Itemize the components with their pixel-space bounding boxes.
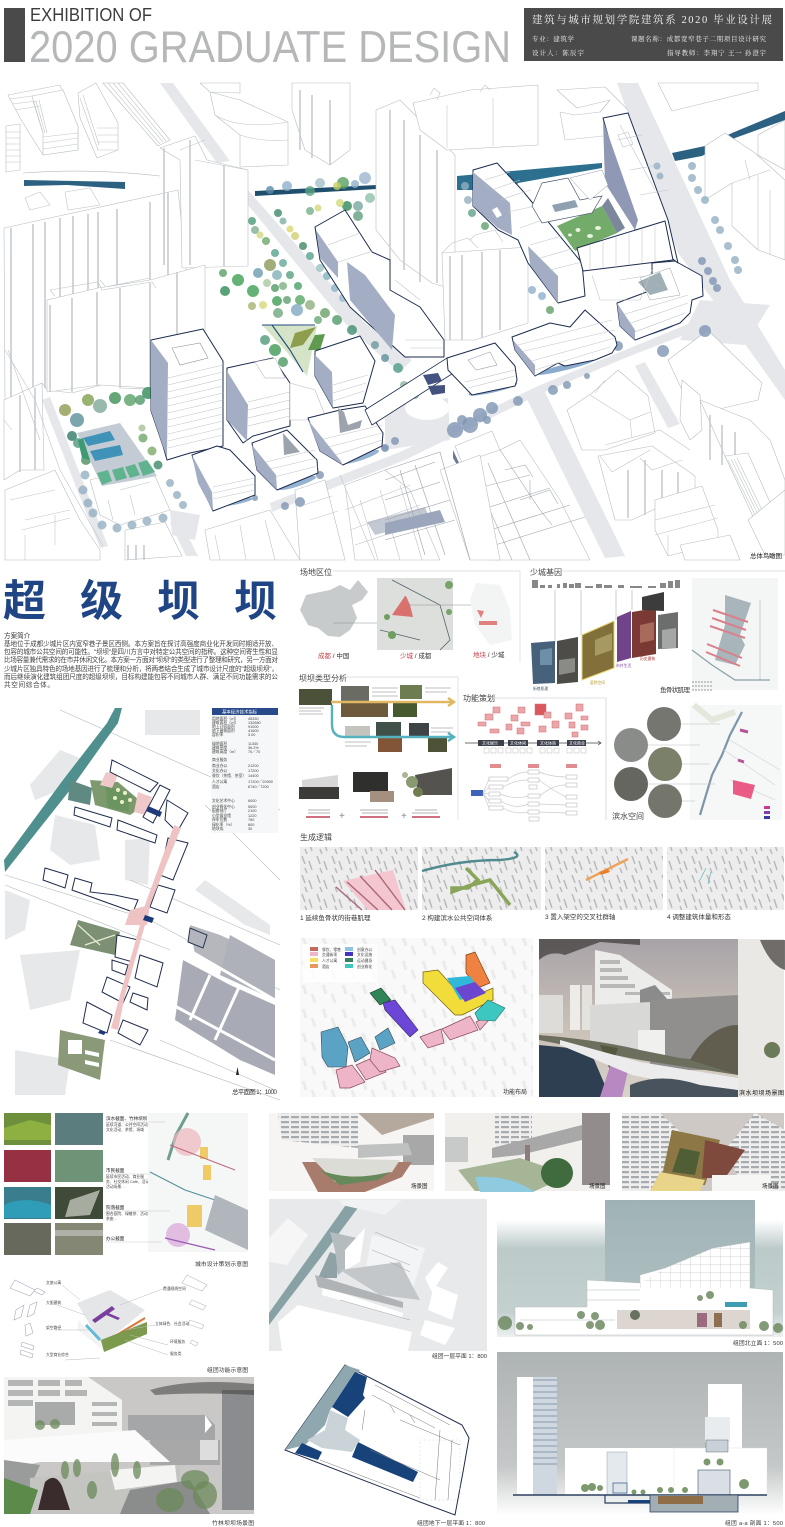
render: bamboo bazi scene bbox=[4, 1377, 254, 1527]
courtyard green bbox=[68, 772, 152, 815]
grey residential blocks bbox=[175, 925, 275, 1075]
beige podium band bbox=[617, 1310, 750, 1329]
panel: shaocheng gene: 庭院空间 bbox=[590, 680, 605, 685]
green courtyard bbox=[557, 198, 625, 251]
strategy texts: 院落截面 bbox=[106, 1204, 125, 1211]
caption: basement plan: 组团地下一层平面 1：800 bbox=[417, 1519, 485, 1527]
part labels: 服务类 bbox=[170, 1351, 182, 1356]
stats table: 绿化率（%） bbox=[212, 822, 234, 827]
render: scene 3 bbox=[622, 1113, 785, 1191]
roads bbox=[42, 83, 785, 558]
panel: shaocheng gene: 街巷肌理 bbox=[533, 686, 548, 691]
stats table: 41600 bbox=[248, 729, 259, 733]
green roof and hill bbox=[539, 1035, 738, 1075]
heading: programming: 功能策划 bbox=[463, 693, 495, 703]
stats table: 11340 bbox=[248, 742, 258, 746]
project title: 超级坝坝 bbox=[3, 578, 311, 626]
legend: 运动健身 bbox=[357, 958, 372, 963]
trees in foreground bbox=[539, 939, 640, 960]
header: project info box: 建筑与城市规划学院建筑系 2020 毕业设计展 bbox=[532, 13, 772, 26]
stats table: 70／70 bbox=[248, 749, 260, 754]
trees around the site bbox=[59, 162, 742, 532]
panel: shaocheng gene: 市井生活 bbox=[616, 663, 631, 668]
text block: project description: 包容的城市公共空间的可能性。"坝坝"是四川方言中对特定公共空间的指称。这种空间寄生性和显 bbox=[4, 647, 278, 656]
stats table: 小型展览馆 bbox=[212, 813, 231, 818]
project building: south podium bbox=[192, 446, 255, 511]
stats table: 地上计容面积 bbox=[212, 724, 235, 729]
site map: shaocheng bbox=[470, 583, 512, 645]
map captions: 少城 / 成都 bbox=[400, 651, 432, 660]
header: project info box: 指导教师：李翔宁 王一 孙澄宇 bbox=[667, 48, 766, 57]
typology photos: row two bbox=[345, 722, 447, 752]
strategy texts: 文化活动、茶馆、场域 bbox=[106, 1127, 144, 1132]
panel: shaocheng gene bbox=[530, 567, 785, 694]
trees bbox=[581, 1458, 749, 1494]
left white building bbox=[4, 1377, 122, 1445]
header: project info box: 设计人：陈辰宇 bbox=[532, 48, 584, 57]
stats table: 30 bbox=[248, 827, 252, 831]
orange volume bbox=[466, 952, 490, 988]
stats table: 建筑密度 bbox=[212, 745, 227, 750]
panel: programming bbox=[463, 693, 606, 821]
part labels: 架空路径 bbox=[46, 1325, 61, 1330]
stats table: 基本经济技术指标 bbox=[222, 708, 258, 716]
background buildings: north centre bbox=[200, 83, 785, 340]
caption: section: 组团 a-a 剖面 1：500 bbox=[725, 1519, 783, 1527]
road lines bbox=[5, 710, 280, 1100]
project building: long bar bbox=[315, 210, 444, 357]
tower and buildings bbox=[539, 939, 784, 1097]
legend: 创业孵化 bbox=[357, 964, 372, 969]
bamboo trees bbox=[35, 1419, 217, 1512]
caption: 场景图 bbox=[589, 1182, 606, 1190]
stats table: 21200 bbox=[248, 764, 259, 768]
stats table: 132680 bbox=[248, 721, 261, 725]
stats table: 17200 bbox=[248, 769, 259, 773]
building silhouette bbox=[515, 1242, 773, 1335]
caption: bamboo scene: 竹林坝坝场景图 bbox=[212, 1519, 254, 1527]
strategy texts: 市民截面 bbox=[106, 1167, 125, 1174]
project building: third tower bbox=[315, 336, 375, 408]
project building: J block bbox=[617, 261, 703, 340]
project building: west wing bbox=[473, 163, 585, 303]
strategy texts: 茶座… bbox=[106, 1216, 118, 1221]
strategy texts: 延续市民活动、商业服 bbox=[106, 1174, 144, 1179]
header: left block and title bbox=[4, 5, 511, 72]
timeline category tags bbox=[478, 740, 586, 753]
project building: I block bbox=[512, 310, 617, 376]
project building: courtyard block F bbox=[308, 406, 383, 465]
caption: masterplan aerial: 总体鸟瞰图 bbox=[750, 551, 782, 560]
waterfront photos bbox=[614, 707, 682, 818]
project building: mid block bbox=[577, 221, 673, 300]
formula texts and plus signs: + bbox=[339, 811, 345, 822]
ground and basement bbox=[513, 1494, 767, 1496]
main massing bbox=[77, 1290, 147, 1352]
heading: shaocheng gene: 少城基因 bbox=[530, 567, 562, 577]
heading: 2020 graduate design: 2020 GRADUATE DESIGN bbox=[29, 23, 511, 72]
aerial axonometric drawing bbox=[3, 83, 785, 563]
right parts bbox=[182, 1275, 207, 1346]
strategy plan bbox=[148, 1113, 248, 1252]
stats table: 人才公寓 bbox=[212, 779, 227, 784]
stats table: 地下建筑面积 bbox=[212, 728, 235, 733]
timeline category tags: 文化休闲 bbox=[510, 740, 526, 746]
stats table: 创业孵化中心 bbox=[212, 804, 235, 809]
typology captions bbox=[299, 688, 453, 746]
text block: project description bbox=[4, 631, 278, 689]
text block: project description: 共空间综合体。 bbox=[4, 680, 54, 689]
park and podium grounds bbox=[70, 920, 120, 955]
stats table: 商业办公 bbox=[212, 763, 227, 768]
pink pedestrian street bbox=[111, 825, 181, 1030]
stats table: 停车位数 bbox=[212, 817, 227, 822]
green and person bbox=[4, 1478, 38, 1514]
pink podium blocks bbox=[336, 1012, 496, 1088]
legend: 人才公寓 bbox=[322, 958, 337, 963]
stats table: 文化办公 bbox=[212, 768, 227, 773]
link bridge and entry pavilion bbox=[365, 358, 455, 425]
stats table: 36.2% bbox=[248, 746, 259, 750]
caption: master plan: 总平面图 1：1000 bbox=[232, 1087, 277, 1096]
panel: urban design strategy plan bbox=[106, 1113, 248, 1268]
step 2: waterfront public system bbox=[422, 847, 541, 922]
stats table: 5000 bbox=[248, 805, 256, 809]
plan: basement bbox=[285, 1365, 485, 1527]
panel: precedent photos bbox=[4, 1113, 103, 1255]
skyline bars bbox=[532, 580, 680, 588]
stats table: 绿地面积 bbox=[212, 741, 227, 746]
left parts bbox=[10, 1280, 45, 1358]
stats table: 17200／20900 bbox=[248, 779, 273, 784]
project building: second tower bbox=[227, 358, 290, 443]
background buildings: south-west bbox=[4, 350, 440, 560]
background buildings: south-east cluster bbox=[385, 330, 785, 560]
legend: 创意办公 bbox=[357, 947, 372, 952]
stats table: 2100 bbox=[248, 809, 256, 813]
water zone bbox=[285, 1365, 360, 1450]
header: project info box bbox=[524, 8, 783, 61]
stats table: 3.00 bbox=[248, 733, 255, 737]
central roof block bbox=[532, 170, 608, 223]
timeline category tags: 文化娱乐 bbox=[482, 740, 498, 746]
stats table: 餐饮（茶馆、茶室） bbox=[212, 773, 246, 778]
icon: china map bbox=[300, 580, 368, 637]
strategy texts: 围合庭院、绿植茶、活动 bbox=[106, 1211, 148, 1216]
stats table: 6740／7200 bbox=[248, 784, 269, 789]
part labels bbox=[46, 1280, 189, 1357]
legend: 餐饮、零售 bbox=[322, 947, 341, 952]
background buildings: north-west slabs bbox=[6, 83, 170, 280]
sports ground bbox=[77, 423, 157, 486]
section a-a bbox=[497, 1352, 783, 1527]
vertical divider and line bbox=[605, 698, 607, 820]
legend: 交通街坝 bbox=[322, 952, 337, 957]
exploded program diagram bbox=[10, 1275, 248, 1374]
render: scene 1 bbox=[269, 1113, 434, 1192]
text block: project description: 少城片区独具特色的场地基因进行了梳理和分析，将两者结合生成了城市设计尺度的"超级坝坝"， bbox=[4, 664, 278, 673]
panel: shaocheng gene: 历史建筑 bbox=[640, 656, 655, 661]
surrounding grey buildings bbox=[5, 710, 270, 1095]
leader lines bbox=[55, 1285, 168, 1360]
project building: main tower bbox=[151, 329, 223, 460]
caption: 滨水坝坝场景图 bbox=[739, 1089, 784, 1097]
white surroundings bbox=[278, 1262, 458, 1351]
stats table: 45330 bbox=[248, 717, 259, 721]
light building zone bbox=[365, 1235, 425, 1292]
stats table: 配套餐厅 bbox=[212, 808, 227, 813]
stats table: 建筑高度（m） bbox=[212, 749, 238, 754]
step 3: elevated cross axis: 3 置入架空的交叉社群轴 bbox=[545, 912, 616, 921]
legend bbox=[303, 944, 377, 982]
step 2: waterfront public system: 2 构建滨水公共空间体系 bbox=[422, 913, 493, 922]
stats table: 容积率 bbox=[212, 732, 224, 737]
panel: bazi typology analysis bbox=[299, 673, 458, 822]
caption and legend: 鱼骨状肌理 bbox=[660, 685, 690, 694]
stats table: 14400 bbox=[248, 774, 259, 778]
timeline category tags: 文化体验 bbox=[540, 740, 556, 746]
map captions: 成都 / 中国 bbox=[318, 651, 349, 660]
part labels: 大型商业综合 bbox=[46, 1352, 69, 1357]
part labels: 环境服务 bbox=[170, 1339, 185, 1344]
strategy texts: 活动场景… bbox=[106, 1184, 125, 1189]
step 3: elevated cross axis bbox=[545, 847, 663, 921]
arrow: yellow flow bbox=[331, 698, 454, 706]
stats table: 800 bbox=[248, 823, 254, 827]
strategy texts: 务、社交休闲 Café、活动 bbox=[106, 1179, 149, 1184]
legend: 文化设施 bbox=[357, 952, 372, 957]
site map: chengdu bbox=[377, 578, 453, 650]
fishbone plan bbox=[692, 578, 778, 690]
step 4: adjust massing bbox=[667, 847, 784, 921]
stats table: 文化艺术中心 bbox=[212, 798, 235, 803]
stats table: 商业服务 bbox=[212, 757, 227, 762]
green volume bbox=[370, 988, 391, 1005]
plan: ground floor bbox=[269, 1199, 487, 1360]
photo collage bbox=[531, 592, 678, 684]
function diagram bbox=[300, 938, 533, 1097]
trees bbox=[498, 1291, 783, 1333]
blue and purple core bbox=[447, 976, 480, 1000]
step 1: alley texture: 1 延续鱼骨状的街巷肌理 bbox=[300, 913, 371, 922]
stats table: 6000 bbox=[248, 799, 256, 803]
stats table: 1220 bbox=[248, 814, 256, 818]
typology photos: row one bbox=[299, 685, 422, 717]
purple volume bbox=[383, 1000, 418, 1037]
part labels: 大胆建筑 bbox=[46, 1300, 61, 1305]
strategy texts: 办公截面 bbox=[106, 1235, 125, 1242]
map captions bbox=[318, 650, 505, 660]
towers bbox=[517, 1377, 767, 1495]
text block: project description: 方案简介 bbox=[4, 631, 31, 640]
stats table: 用地面积（㎡） bbox=[212, 716, 239, 721]
stats table: 91000 bbox=[248, 725, 259, 729]
purple walkway bbox=[600, 1060, 630, 1097]
arrow: teal flow bbox=[332, 705, 454, 741]
stats table: 酒店 bbox=[212, 784, 220, 789]
timeline axis bbox=[465, 741, 601, 745]
heading: waterfront space: 滨水空间 bbox=[612, 811, 644, 821]
text block: project description: 基地位于成都少城片区内宽窄巷子景区西侧。本方案旨在探讨高强度商业化开发同时期适开放、 bbox=[4, 639, 278, 648]
north arrow bbox=[236, 1067, 239, 1075]
water bbox=[539, 1045, 610, 1097]
stats table: 建筑面积（㎡） bbox=[212, 720, 239, 725]
blue office towers bbox=[321, 1027, 395, 1067]
caption: strategy plan: 城市设计策划示意图 bbox=[195, 1260, 248, 1268]
legend: 酒店 bbox=[322, 964, 330, 969]
heading: typology analysis: 坝坝类型分析 bbox=[299, 673, 347, 683]
heading: site location: 场地区位 bbox=[300, 567, 332, 577]
render: scene 2 bbox=[445, 1113, 610, 1192]
panel: waterfront space bbox=[606, 698, 782, 821]
part labels: 立体绿色、社会活动 bbox=[155, 1321, 189, 1326]
panel: site location bbox=[300, 567, 520, 662]
heading: generation logic: 生成逻辑 bbox=[300, 832, 332, 842]
navy areas bbox=[332, 1372, 367, 1417]
strategy texts: 延续河道、公共空间活动 bbox=[106, 1122, 148, 1127]
bottom collage photos bbox=[299, 768, 452, 802]
light corridor bbox=[307, 1410, 360, 1452]
yellow volume bbox=[423, 970, 493, 1015]
caption: ground plan: 组团一层平面 1：800 bbox=[432, 1352, 487, 1360]
waterfront map bbox=[690, 705, 782, 820]
mid facade building bbox=[128, 1415, 215, 1440]
text block: project description: 比场容量兼代需求的在市井休闲文化。本方案一方面对"坝坝"的类型进行了整理和研究，另一方面对 bbox=[4, 655, 278, 664]
map captions: 地块 / 少城 bbox=[473, 650, 505, 659]
caption: 场景图 bbox=[411, 1182, 428, 1190]
background buildings: tall residential row bbox=[4, 136, 248, 400]
caption: 场景图 bbox=[762, 1182, 779, 1190]
stats table: 地块成 bbox=[212, 826, 224, 831]
pink program tags bbox=[478, 704, 588, 737]
caption: function diagram: 功能布局 bbox=[503, 1088, 527, 1096]
caption: elevation: 组团北立面 1：500 bbox=[733, 1339, 783, 1347]
heading: exhibition of: EXHIBITION OF bbox=[30, 5, 152, 25]
header: project info box: 专业：建筑学 bbox=[532, 34, 574, 43]
elevation: north bbox=[497, 1200, 783, 1347]
strategy texts bbox=[106, 1115, 149, 1242]
river bbox=[269, 1202, 360, 1325]
teal volume bbox=[475, 1000, 505, 1021]
step 4: adjust massing: 4 调整建筑体量和形态 bbox=[667, 912, 731, 921]
render: waterfront bazi scene bbox=[539, 939, 785, 1097]
formula texts and plus signs bbox=[306, 810, 440, 822]
part labels: 贯通视线空间 bbox=[163, 1286, 186, 1291]
project footprints bbox=[43, 760, 188, 1045]
formula texts and plus signs: + bbox=[401, 811, 407, 822]
rivers bbox=[23, 111, 785, 196]
panel: generation logic bbox=[300, 832, 784, 922]
plaza canopy bbox=[4, 1430, 170, 1470]
caption: exploded diagram: 组团功能示意图 bbox=[207, 1366, 248, 1374]
master plan bbox=[3, 705, 280, 1100]
plaza ground bbox=[30, 1465, 180, 1514]
corridor bbox=[315, 1275, 403, 1308]
room lines bbox=[320, 1385, 460, 1500]
step 1: alley texture bbox=[300, 847, 418, 922]
project building: H block bbox=[447, 343, 517, 395]
relation network bbox=[471, 764, 577, 821]
header: project info box: 课题名称：成都宽窄巷子二期项目设计研究 bbox=[631, 34, 766, 43]
part labels: 文旅公寓 bbox=[46, 1280, 61, 1285]
stats table: 760 bbox=[248, 818, 254, 822]
project building: courtyard block D bbox=[252, 430, 318, 490]
text block: project description: 而后继续演化建筑组团尺度的超级坝坝，目标构建能包容不同城市人群、满足不同功能需求的公 bbox=[4, 672, 278, 681]
project building: north tall bar bbox=[603, 113, 678, 263]
strategy texts: 滨水截面、竹林坝坝 bbox=[106, 1115, 148, 1122]
connecting mass bbox=[290, 383, 325, 420]
leader lines bbox=[648, 724, 720, 801]
small park with pavilion outline bbox=[262, 325, 325, 376]
river bbox=[4, 708, 122, 872]
stats table bbox=[211, 708, 278, 833]
dark block bbox=[4, 8, 25, 62]
timeline category tags: 文化商业 bbox=[569, 740, 585, 746]
